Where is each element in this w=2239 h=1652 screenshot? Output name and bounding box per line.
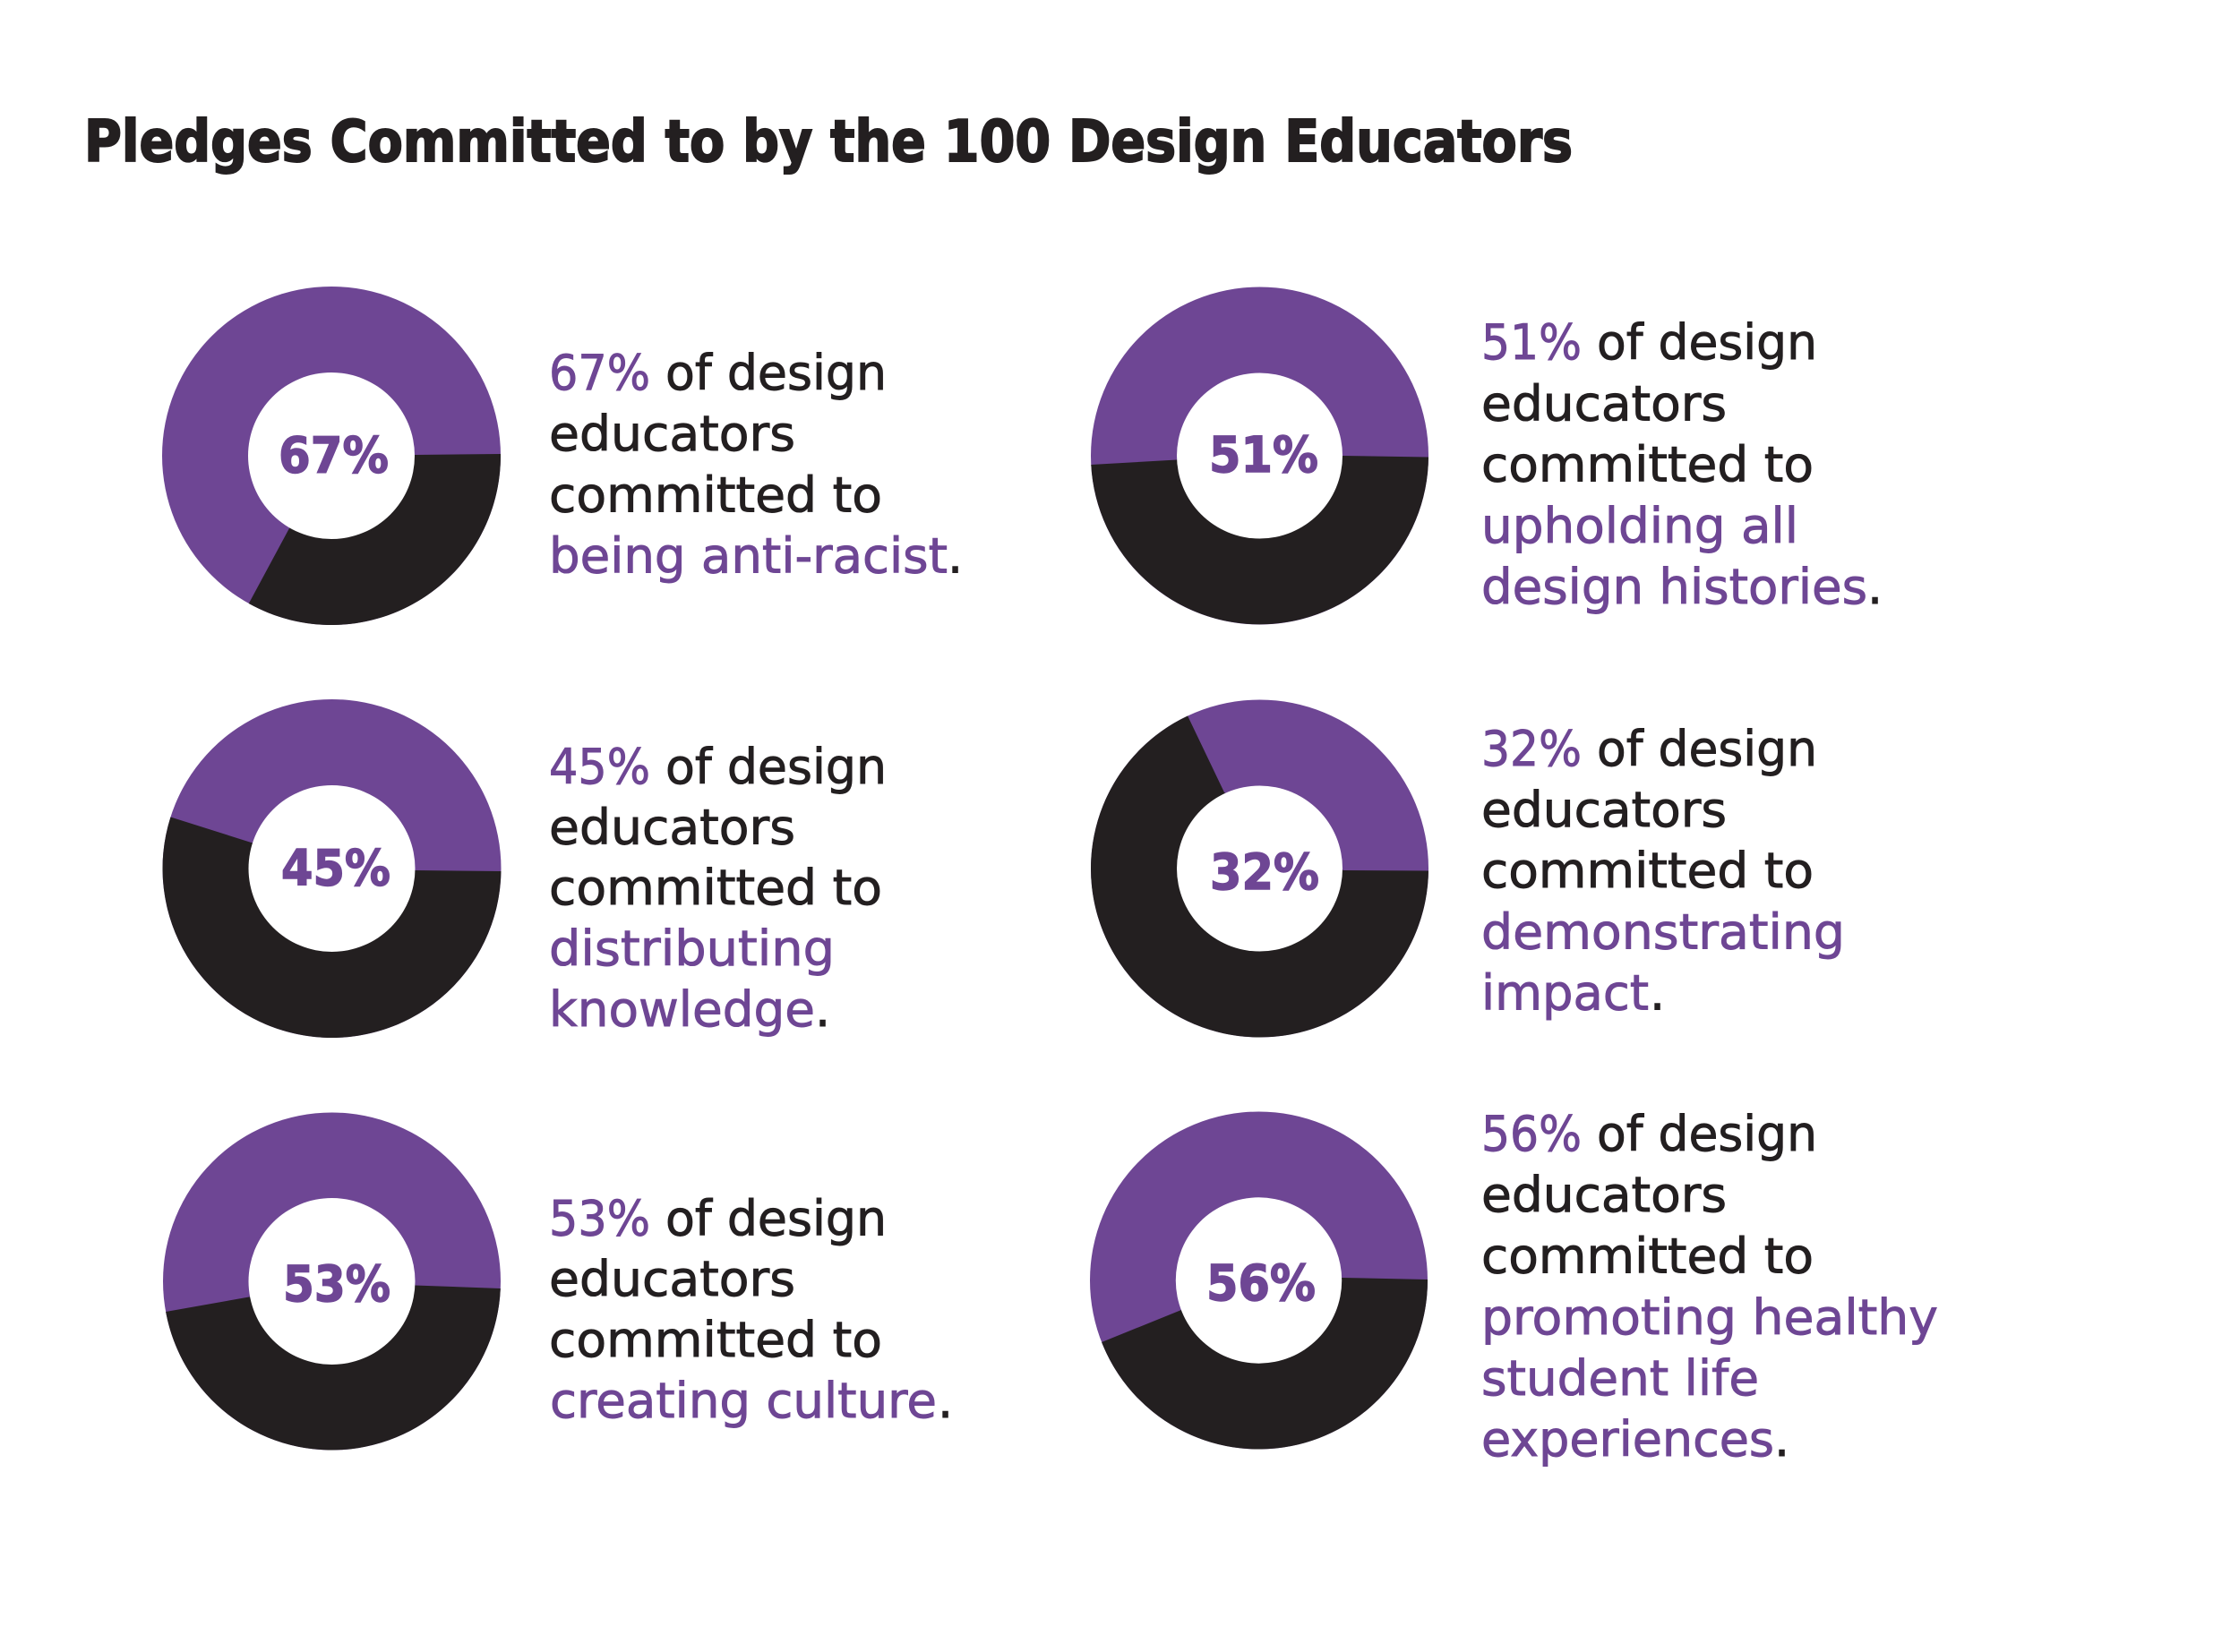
text: 56% promoting healthy student life experiences — [1481, 1106, 1938, 1468]
title: Pledges Committed to by the 100 Design Educators — [84, 109, 1573, 175]
donut chart: 45% — [163, 699, 502, 1038]
donut chart: 67%: 67% — [279, 426, 389, 484]
text: 67% being anti-racist: . — [948, 528, 963, 584]
donut chart: 53% — [163, 1112, 501, 1451]
donut chart: 32%: 32% — [1210, 843, 1319, 901]
text: 51% upholding all design histories — [1481, 314, 1883, 615]
text: 56% promoting healthy student life experiences: 56% — [1481, 1106, 1582, 1162]
text: 45% distributing knowledge: knowledge — [549, 981, 815, 1038]
text: 67% being anti-racist: 67% — [549, 345, 650, 401]
text: 53% creating culture: . — [938, 1373, 953, 1429]
text: 51% upholding all design histories: design histories — [1481, 559, 1867, 615]
text: 45% distributing knowledge: 45% — [549, 739, 650, 795]
text: 32% demonstrating impact: educators — [1481, 782, 1727, 838]
donut chart: 56%: 56% — [1206, 1254, 1316, 1312]
text: 45% distributing knowledge: distributing — [549, 920, 835, 977]
text: 45% distributing knowledge: . — [815, 981, 830, 1038]
text: 56% promoting healthy student life experiences: . — [1774, 1411, 1789, 1468]
text: 53% creating culture: educators — [549, 1251, 795, 1307]
text: 67% being anti-racist: of design — [665, 345, 887, 401]
text: 51% upholding all design histories: upholding all — [1481, 498, 1798, 554]
donut chart: 56% — [1090, 1112, 1428, 1450]
text: 45% distributing knowledge: educators — [549, 799, 795, 856]
text: 67% being anti-racist: educators — [549, 406, 795, 462]
panel: 51% upholding all design histories — [1091, 287, 1883, 625]
panel: 56% promoting healthy student life experiences — [1090, 1106, 1938, 1468]
text: 32% demonstrating impact — [1481, 721, 1845, 1021]
text: 45% distributing knowledge: committed to — [549, 860, 882, 916]
text: 53% creating culture: committed to — [549, 1312, 882, 1368]
donut chart: 51% — [1091, 287, 1428, 625]
donut chart: 51%: 51% — [1209, 426, 1318, 484]
text: 51% upholding all design histories: 51% — [1481, 314, 1582, 371]
text: 56% promoting healthy student life experiences: of design — [1597, 1106, 1817, 1162]
text: 45% distributing knowledge — [549, 739, 887, 1038]
text: 45% distributing knowledge: of design — [665, 739, 887, 795]
text: 53% creating culture — [549, 1191, 953, 1429]
text: 53% creating culture: of design — [665, 1191, 887, 1246]
donut chart: 32% — [1091, 700, 1428, 1037]
text: 32% demonstrating impact: 32% — [1481, 721, 1582, 777]
text: 56% promoting healthy student life experiences: promoting healthy — [1481, 1289, 1938, 1346]
text: 32% demonstrating impact: demonstrating — [1481, 904, 1845, 960]
text: 56% promoting healthy student life experiences: experiences — [1481, 1411, 1774, 1468]
text: 32% demonstrating impact: . — [1650, 965, 1665, 1021]
donut chart: 45%: 45% — [281, 840, 390, 897]
text: 51% upholding all design histories: of design — [1597, 314, 1817, 371]
panel: 53% creating culture — [163, 1112, 953, 1451]
text: 51% upholding all design histories: . — [1867, 559, 1883, 615]
text: 32% demonstrating impact: of design — [1597, 721, 1817, 777]
text: 67% being anti-racist — [549, 345, 963, 584]
text: 67% being anti-racist: committed to — [549, 467, 882, 523]
text: 56% promoting healthy student life experiences: committed to — [1481, 1228, 1814, 1284]
donut chart: 53%: 53% — [283, 1255, 390, 1313]
text: 53% creating culture: creating culture — [550, 1373, 937, 1429]
text: 51% upholding all design histories: educators — [1481, 376, 1727, 432]
text: 56% promoting healthy student life experiences: student life — [1481, 1350, 1759, 1407]
panel: 45% distributing knowledge — [163, 699, 887, 1038]
text: 67% being anti-racist: being anti-racist — [549, 528, 948, 584]
text: 32% demonstrating impact: committed to — [1481, 843, 1814, 899]
text: 56% promoting healthy student life experiences: educators — [1481, 1167, 1727, 1223]
text: 53% creating culture: 53% — [549, 1191, 650, 1246]
panel: 67% being anti-racist — [162, 287, 963, 625]
text: 32% demonstrating impact: impact — [1481, 965, 1649, 1021]
panel: 32% demonstrating impact — [1091, 700, 1845, 1037]
text: 51% upholding all design histories: committed to — [1481, 437, 1814, 492]
donut chart: 67% — [162, 287, 501, 625]
